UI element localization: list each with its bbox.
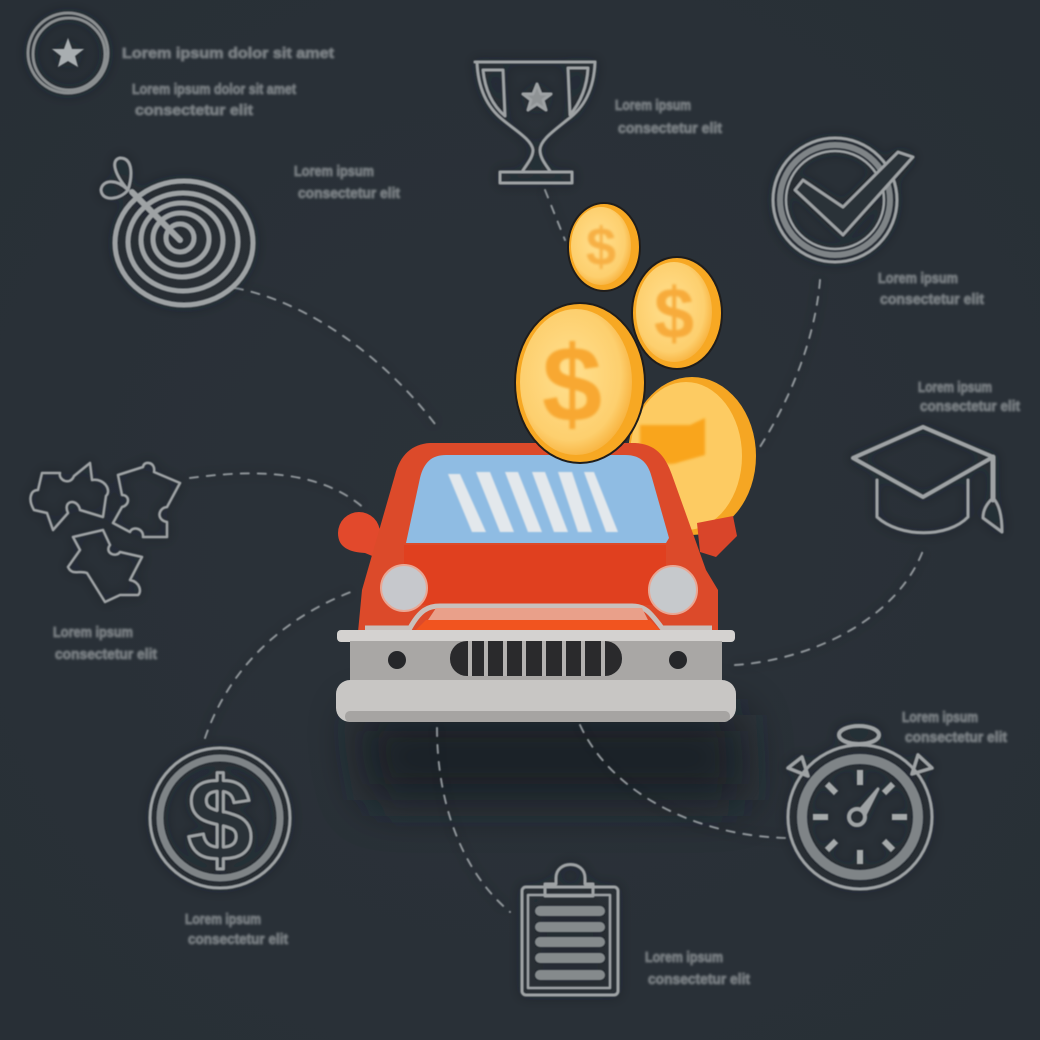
clipboard text bbox=[645, 949, 750, 988]
screw right bbox=[669, 651, 687, 669]
lower bumper bbox=[336, 680, 736, 722]
windshield bbox=[406, 455, 669, 543]
trophy text bbox=[615, 97, 722, 137]
heading text bbox=[122, 45, 334, 119]
hood stripes bbox=[365, 606, 712, 628]
target text: consectetur elit bbox=[298, 185, 400, 202]
trophy text: consectetur elit bbox=[618, 120, 722, 137]
dollar text: Lorem ipsum bbox=[185, 911, 261, 928]
car shadow bbox=[355, 715, 745, 800]
screw left bbox=[388, 651, 406, 669]
headlight left bbox=[381, 565, 427, 611]
dollar text: consectetur elit bbox=[188, 931, 288, 948]
puzzle text: consectetur elit bbox=[55, 646, 157, 663]
hood panel bbox=[404, 545, 666, 605]
icon: graduation cap bbox=[853, 427, 1002, 533]
icon: stopwatch bbox=[788, 726, 932, 889]
target text bbox=[294, 163, 400, 202]
cap text bbox=[918, 379, 1020, 415]
coin medium bbox=[632, 257, 722, 369]
coin small top: $ bbox=[586, 217, 616, 277]
dollar text bbox=[185, 911, 288, 948]
icon: check mark bbox=[773, 138, 913, 262]
check text: Lorem ipsum bbox=[878, 270, 958, 287]
icon: dollar coin bbox=[150, 748, 290, 888]
icon: dollar coin: $ bbox=[187, 754, 253, 886]
puzzle text: Lorem ipsum bbox=[53, 624, 133, 641]
target text: Lorem ipsum bbox=[294, 163, 374, 180]
clipboard text: consectetur elit bbox=[648, 971, 750, 988]
check text: consectetur elit bbox=[880, 291, 984, 308]
coin medium: $ bbox=[654, 274, 694, 354]
car body bbox=[358, 443, 718, 632]
coin large bbox=[515, 303, 645, 463]
stopwatch text bbox=[902, 709, 1007, 746]
front panel bbox=[350, 641, 722, 685]
stopwatch text: consectetur elit bbox=[905, 729, 1007, 746]
coin small top bbox=[568, 203, 640, 291]
coin large: $ bbox=[542, 323, 602, 444]
icon: puzzle pieces bbox=[31, 463, 180, 602]
check text bbox=[878, 270, 984, 308]
cap text: Lorem ipsum bbox=[918, 379, 992, 396]
icon: trophy bbox=[475, 62, 595, 183]
trophy text: Lorem ipsum bbox=[615, 97, 691, 114]
heading text: consectetur elit bbox=[135, 102, 253, 119]
stopwatch text: Lorem ipsum bbox=[902, 709, 978, 726]
clipboard text: Lorem ipsum bbox=[645, 949, 723, 966]
windshield reflections bbox=[448, 472, 618, 532]
icon: star badge bbox=[28, 13, 108, 93]
coin stack behind car bbox=[628, 377, 756, 535]
left mirror bbox=[338, 512, 382, 560]
heading text: Lorem ipsum dolor sit amet bbox=[132, 81, 296, 98]
headlight right bbox=[649, 566, 697, 614]
dashed connectors bbox=[190, 190, 925, 912]
car bbox=[336, 443, 737, 722]
heading text: Lorem ipsum dolor sit amet bbox=[122, 45, 334, 62]
icon: clipboard bbox=[522, 864, 618, 995]
bumper lip bbox=[337, 630, 735, 642]
puzzle text bbox=[53, 624, 157, 663]
icon: target with dart bbox=[101, 158, 253, 305]
grille bbox=[450, 641, 622, 676]
right mirror bbox=[697, 516, 737, 557]
cap text: consectetur elit bbox=[920, 398, 1020, 415]
